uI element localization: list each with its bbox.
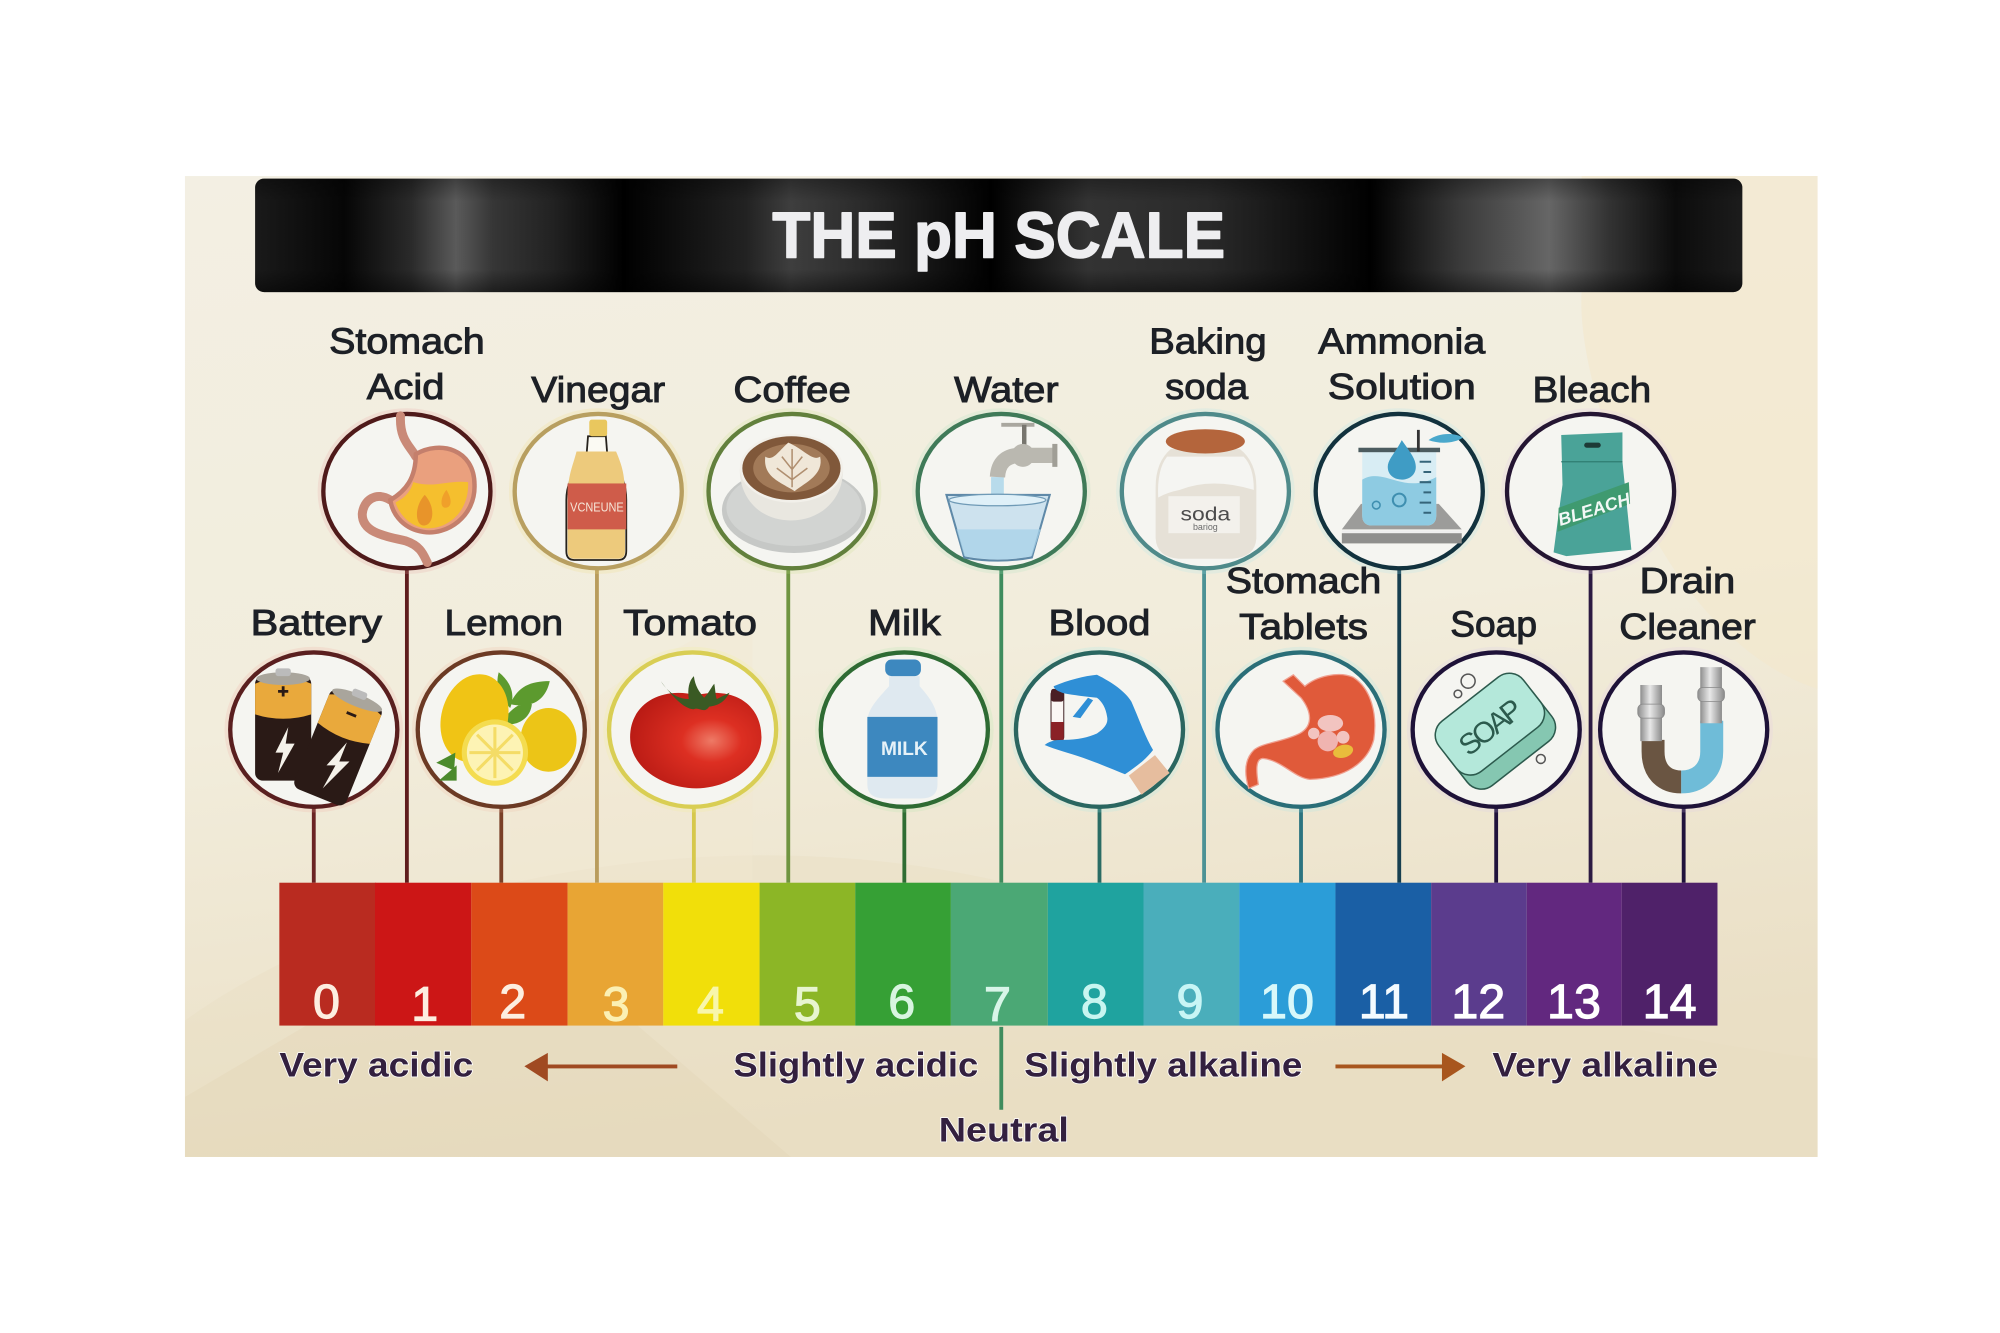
infographic: the pH scale	[185, 176, 1818, 1157]
scale numbers: 10	[1260, 975, 1314, 1029]
connector lines to the scale	[314, 569, 1684, 1110]
icon: milk bottle: MILK	[881, 739, 928, 760]
label: Drain Cleaner: Drain	[1640, 561, 1735, 601]
item: Vinegar	[515, 370, 682, 568]
item: Stomach Acid	[323, 321, 490, 568]
scale numbers: 5	[794, 977, 821, 1031]
icon: U-shaped drain pipe	[1600, 652, 1767, 807]
icon: tomato	[609, 652, 776, 807]
item: Soap	[1413, 605, 1580, 807]
scale captions and arrows	[279, 1047, 1718, 1150]
scale numbers: 2	[499, 975, 526, 1029]
label: Lemon: Lemon	[445, 603, 563, 643]
label: Battery: Battery	[251, 603, 382, 643]
label: Coffee: Coffee	[733, 370, 851, 410]
scale numbers	[313, 975, 1697, 1031]
panel: cream background	[185, 176, 1818, 1157]
arrow: toward alkaline	[1335, 1056, 1462, 1078]
scale numbers: 6	[888, 975, 915, 1029]
icon: beaker and drop	[1316, 414, 1483, 568]
label: Ammonia Solution: Ammonia	[1318, 321, 1485, 361]
icon: batteries	[230, 652, 397, 808]
scale numbers: 1	[411, 977, 438, 1031]
item: Baking soda	[1122, 321, 1289, 568]
item: Bleach	[1507, 370, 1674, 568]
scale numbers: 8	[1081, 975, 1108, 1029]
label: Baking soda	[1149, 321, 1267, 407]
label: Baking soda: Baking	[1149, 321, 1267, 361]
label: Milk: Milk	[868, 603, 941, 643]
scale numbers: 7	[984, 977, 1011, 1031]
label: Drain Cleaner	[1619, 561, 1756, 647]
scale numbers: 11	[1359, 975, 1409, 1029]
label: Stomach Acid: Stomach	[329, 321, 485, 361]
icon: soda jar	[1122, 414, 1289, 568]
icon: coffee cup	[709, 414, 876, 568]
icon: gloved hand with blood tube	[1016, 652, 1183, 807]
icon: bleach bag	[1507, 414, 1674, 568]
label: Stomach Acid	[329, 321, 485, 407]
label: Stomach Acid: Acid	[367, 367, 445, 407]
icon: bleach bag: BLEACH	[1556, 489, 1634, 530]
item: Lemon	[418, 603, 585, 807]
icon: soap bar: SOAP	[1453, 693, 1529, 762]
icon: soda jar: soda	[1180, 504, 1231, 525]
label: Vinegar: Vinegar	[531, 370, 665, 410]
label: Drain Cleaner: Cleaner	[1619, 607, 1756, 647]
scale numbers: 14	[1643, 975, 1697, 1029]
icon: stomach with acid	[323, 414, 490, 568]
icon: vinegar bottle	[515, 414, 682, 568]
arrow: toward acidic	[528, 1056, 677, 1078]
label: Baking soda: soda	[1165, 367, 1248, 407]
scale numbers: 9	[1177, 975, 1204, 1029]
label: Stomach Tablets	[1226, 561, 1381, 647]
item: Milk	[821, 603, 988, 807]
item: Water	[918, 370, 1085, 568]
item: Tomato	[609, 603, 776, 807]
title: THE pH SCALE	[772, 199, 1225, 272]
item: Stomach Tablets	[1217, 561, 1385, 807]
label: Tomato: Tomato	[623, 603, 757, 643]
label: Ammonia Solution	[1318, 321, 1485, 407]
icon: soda jar: bariog	[1193, 522, 1218, 532]
icon: stomach with tablets	[1217, 652, 1385, 807]
icon: tap and glass	[918, 414, 1085, 568]
caption: Slightly alkaline: Slightly alkaline	[1024, 1047, 1302, 1085]
scale numbers: 3	[603, 977, 630, 1031]
item: Battery	[230, 603, 397, 808]
label: Ammonia Solution: Solution	[1328, 367, 1476, 407]
caption: Very alkaline: Very alkaline	[1492, 1047, 1718, 1085]
caption: Very acidic: Very acidic	[279, 1047, 473, 1085]
label: Blood: Blood	[1048, 603, 1151, 643]
icon: milk bottle	[821, 652, 988, 807]
scale numbers: 0	[313, 975, 340, 1029]
item: Coffee	[709, 370, 876, 568]
title banner	[255, 179, 1742, 292]
item: Blood	[1016, 603, 1183, 807]
scale numbers: 13	[1547, 975, 1601, 1029]
label: Water: Water	[954, 370, 1059, 410]
icon: soap bar	[1413, 652, 1580, 807]
caption: Slightly acidic: Slightly acidic	[733, 1047, 978, 1085]
label: Bleach: Bleach	[1533, 370, 1651, 410]
scale numbers: 4	[697, 977, 724, 1031]
label: Stomach Tablets: Stomach	[1226, 561, 1381, 601]
label: Stomach Tablets: Tablets	[1239, 607, 1368, 647]
pH colour bar	[279, 883, 1717, 1031]
icon: lemons	[418, 652, 585, 807]
item: Ammonia Solution	[1316, 321, 1485, 568]
label: Soap: Soap	[1450, 605, 1537, 645]
item: Drain Cleaner	[1600, 561, 1767, 807]
icon: vinegar bottle: VCNEUNE	[570, 500, 624, 515]
caption: Neutral: Neutral	[939, 1112, 1069, 1150]
scale numbers: 12	[1451, 975, 1505, 1029]
